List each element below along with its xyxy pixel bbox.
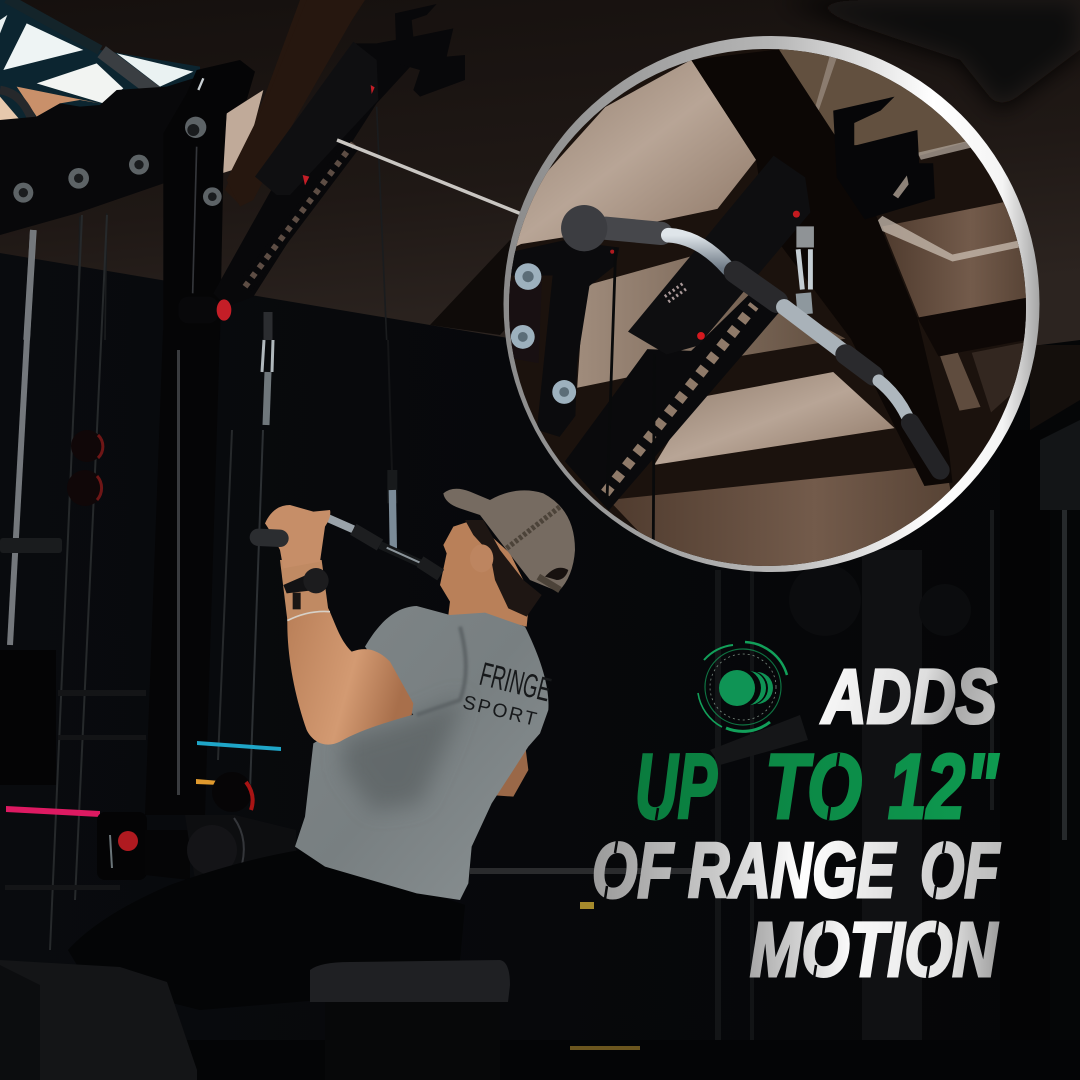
zoom circle [500, 36, 1040, 572]
shirt logo [461, 654, 555, 732]
icon: range of motion target [698, 642, 787, 731]
headline line: of range of [592, 826, 1001, 914]
connector line to zoom circle [337, 140, 524, 215]
hole rail [605, 305, 754, 493]
shirt logo: SPORT [461, 692, 539, 731]
red lights [697, 332, 705, 340]
forearm and wrist [280, 560, 328, 620]
athlete [68, 312, 575, 1010]
extension arm [565, 290, 781, 511]
headline line: adds: ADDS [820, 654, 997, 740]
headline line: up to 12 inches: TO [765, 736, 862, 838]
bracket with bolts [500, 240, 619, 437]
lat bar [328, 518, 441, 575]
back arm [490, 743, 528, 797]
hook [833, 97, 935, 219]
arm [287, 608, 413, 745]
bar swivel [377, 470, 407, 503]
swivel and chain [798, 226, 810, 314]
neck and face [440, 520, 530, 627]
headline [592, 654, 1001, 993]
window light [0, 0, 263, 173]
side bars [0, 538, 62, 553]
thin cables [607, 247, 654, 542]
red accents [303, 85, 375, 185]
ceiling panels [500, 49, 1030, 570]
cap [443, 489, 575, 592]
rack: upper left frame, arm and window [0, 0, 465, 340]
rack: lower left post and weight stack [0, 215, 695, 1050]
vertical post [163, 60, 255, 340]
ear [470, 544, 493, 572]
bar end grip [258, 537, 280, 538]
weight stack [0, 650, 56, 785]
background: right side rack frames [0, 420, 1080, 1080]
watch [283, 573, 315, 593]
horizontal beam [0, 78, 193, 235]
sleeve fold [417, 627, 466, 715]
shirt [295, 606, 549, 900]
red knob [217, 299, 231, 321]
dark diagonal beam [691, 49, 952, 486]
headline line: up to 12 inches: 12" [888, 736, 999, 838]
hole rail [245, 143, 353, 287]
headline line: up to 12 inches [635, 736, 999, 838]
hair [465, 520, 542, 617]
headline line: motion: MOTION [750, 907, 998, 993]
chain hook above bar [262, 312, 273, 425]
barbell [470, 868, 695, 874]
coloured strips [197, 741, 281, 751]
hand [265, 505, 330, 568]
seat back pad [97, 812, 296, 880]
pants [68, 850, 465, 1010]
bar end ball [561, 205, 607, 251]
headline line: of range of: RANGE [688, 826, 896, 914]
pipes [0, 0, 170, 193]
top hook [395, 4, 465, 97]
perforated plate [628, 156, 810, 354]
headline line: of range of: OF [592, 826, 675, 914]
bench and seat pad [0, 960, 510, 1080]
red pulley lens [212, 772, 252, 812]
extension arm [213, 37, 413, 307]
headline line: of range of: OF [920, 826, 1001, 914]
bolts [13, 117, 222, 206]
brown diagonal beam [227, 0, 363, 207]
pulley lights [71, 430, 103, 462]
background: ceiling [0, 0, 1080, 430]
shirt logo: FRINGE [476, 656, 555, 709]
stencil cuts in lettering [605, 753, 945, 978]
shirt shadow [343, 697, 463, 810]
headline line: up to 12 inches: UP [635, 736, 717, 838]
overhead pull-up rod [27, 230, 33, 340]
lat pulldown bar [605, 228, 940, 470]
